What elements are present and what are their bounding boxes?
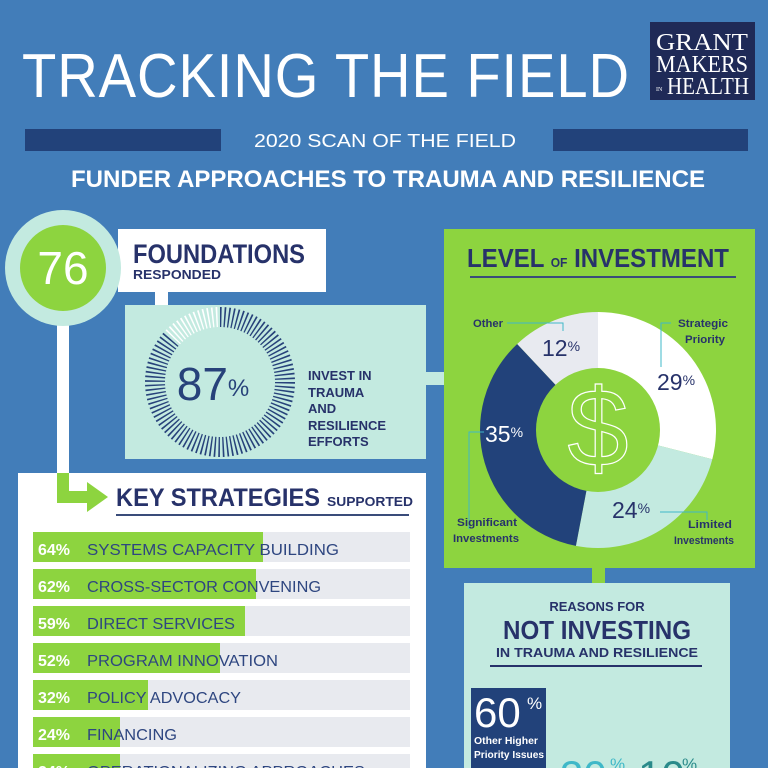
stat: 60% other higher priority: Other Higher (474, 736, 538, 747)
labels: donut: Other (473, 318, 504, 330)
subtitle band: 2020 scan (25, 129, 748, 151)
labels: donut: Priority (685, 334, 726, 346)
panel: foundations responded: RESPONDED (133, 267, 221, 282)
labels: donut: % (638, 500, 650, 516)
chart: tick ring 87%: % (228, 375, 249, 402)
text: invest in trauma: AND (308, 401, 336, 416)
labels: donut: % (511, 424, 523, 440)
text: invest in trauma (308, 368, 386, 449)
heading: key strategies (116, 484, 413, 516)
bar chart: strategies: 64% (38, 542, 70, 559)
bar chart: strategies: 24% (38, 727, 70, 744)
text: invest in trauma: EFFORTS (308, 434, 369, 449)
panel: level of investment (444, 229, 755, 568)
bar chart: strategies: 59% (38, 616, 70, 633)
subtitle: funder approaches: FUNDER APPROACHES TO TRAUMA AND RESILIENCE (71, 166, 705, 193)
logo: Grantmakers in Health: IN (656, 87, 663, 93)
chart: tick ring 87% (155, 317, 285, 447)
panel: foundations responded: FOUNDATIONS (133, 239, 305, 269)
icon: dollar: $ (567, 367, 629, 490)
bar chart: strategies: SYSTEMS CAPACITY BUILDING (87, 542, 339, 559)
stat: 60% other higher priority: Priority Issues (474, 750, 544, 761)
heading: not investing: NOT INVESTING (503, 615, 691, 645)
stat: 60% other higher priority: % (527, 694, 542, 713)
bar chart: strategies: 62% (38, 579, 70, 596)
labels: donut: % (683, 372, 695, 388)
labels: donut: Investments (674, 535, 734, 547)
labels: donut: % (568, 338, 580, 354)
labels: donut: Investments (453, 533, 519, 545)
panel: reasons for not investing (464, 583, 730, 768)
badge: 76: 76 (37, 242, 89, 294)
heading: not investing: REASONS FOR (549, 599, 645, 614)
text: invest in trauma: RESILIENCE (308, 418, 386, 433)
text: invest in trauma: TRAUMA (308, 385, 365, 400)
heading: not investing: IN TRAUMA AND RESILIENCE (496, 645, 698, 660)
labels: donut: 24 (612, 497, 638, 523)
panel: foundations responded (118, 229, 326, 292)
stat: 60% other higher priority: 60 (474, 689, 521, 736)
bar chart: strategies (33, 532, 410, 768)
logo: Grantmakers in Health: MAKERS (656, 52, 748, 78)
bar chart: strategies: POLICY ADVOCACY (87, 690, 241, 707)
labels: donut: Significant (457, 517, 517, 529)
bar chart: strategies: FINANCING (87, 727, 177, 744)
connector lines (57, 290, 605, 585)
labels: donut: 29 (657, 369, 683, 395)
heading: key strategies: KEY STRATEGIES (116, 484, 320, 512)
bar chart: strategies: 52% (38, 653, 70, 670)
stat: 60% other higher priority (471, 688, 546, 768)
text: invest in trauma: INVEST IN (308, 368, 372, 383)
labels: donut: Limited (688, 519, 732, 531)
chart: donut (480, 312, 716, 548)
bar chart: strategies: CROSS-SECTOR CONVENING (87, 579, 321, 596)
heading: level of investment: LEVEL OF INVESTMENT (467, 243, 729, 273)
labels: donut: Strategic (678, 318, 728, 330)
bar chart: strategies: DIRECT SERVICES (87, 616, 235, 633)
heading: key strategies: SUPPORTED (327, 494, 413, 509)
chart: tick ring 87%: 87 (177, 358, 228, 410)
panel: 87% invest (125, 305, 426, 459)
title: TRACKING THE FIELD (22, 42, 630, 111)
arrow: green elbow (57, 473, 108, 512)
labels: donut: 35 (485, 421, 511, 447)
logo: Grantmakers in Health (650, 22, 755, 100)
bar chart: strategies: 32% (38, 690, 70, 707)
labels: donut: 12 (542, 335, 568, 361)
labels: donut (453, 318, 734, 547)
bar chart: strategies: PROGRAM INNOVATION (87, 653, 278, 670)
badge: 76 (5, 210, 121, 326)
heading: not investing (490, 599, 702, 667)
logo: Grantmakers in Health: HEALTH (667, 74, 749, 100)
logo: Grantmakers in Health: GRANT (656, 30, 748, 56)
panel: key strategies (18, 473, 426, 768)
stat: 30% and 10% (cut) (560, 752, 697, 768)
subtitle band: 2020 scan: 2020 SCAN OF THE FIELD (254, 131, 516, 151)
